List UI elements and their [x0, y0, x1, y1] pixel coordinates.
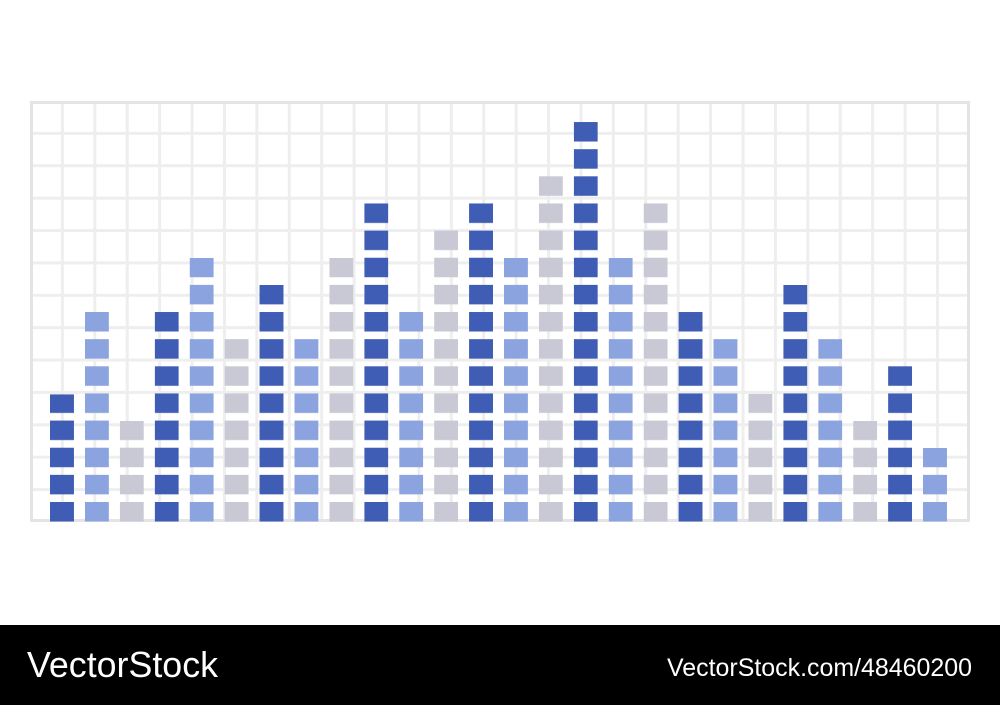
- footer logo text: VectorStock: [27, 644, 219, 685]
- footer bar: [0, 625, 1000, 705]
- bar columns: [50, 121, 947, 522]
- footer url text: VectorStock.com/48460200: [667, 654, 972, 682]
- background grid panel: [30, 101, 970, 522]
